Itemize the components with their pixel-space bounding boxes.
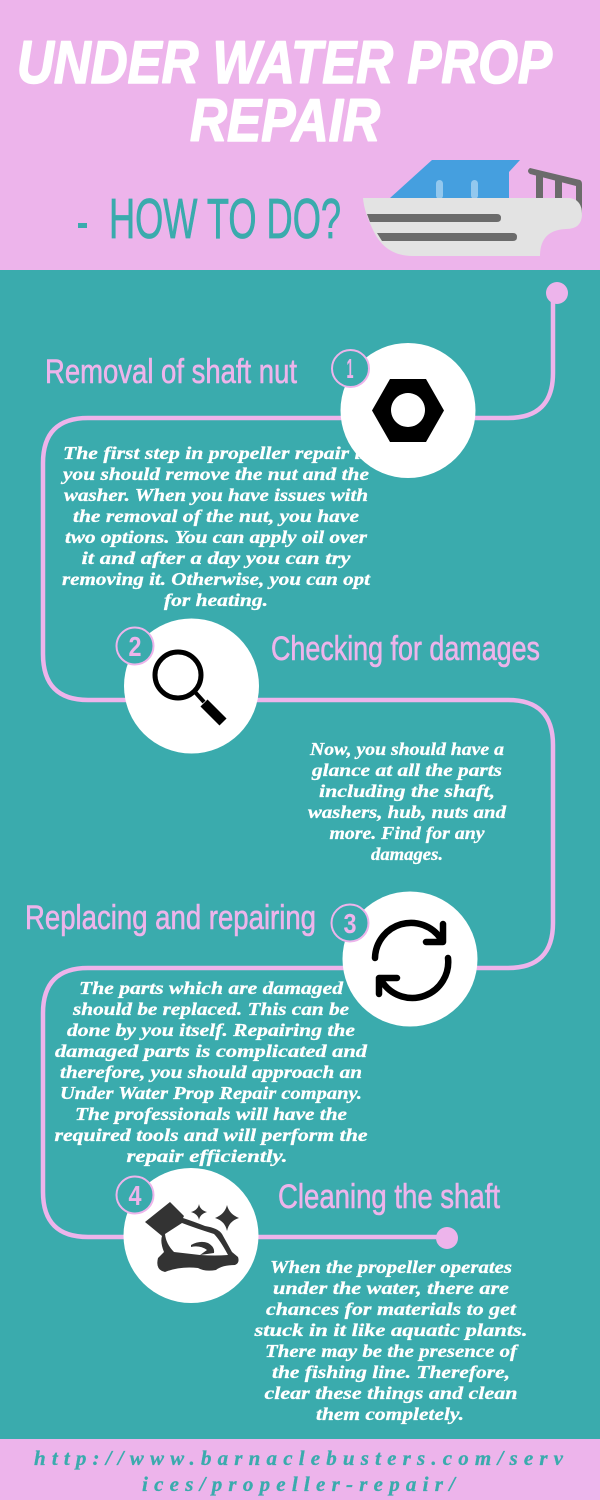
step 4 text: [253, 1257, 528, 1424]
step 3 badge: [332, 904, 368, 942]
step 1 text: you should remove the nut and the: [61, 464, 369, 484]
footer panel: [0, 1439, 600, 1500]
step 1 text: for heating.: [164, 590, 268, 610]
step 3 text: repair efficiently.: [126, 1146, 288, 1166]
step 1 icon circle: [340, 343, 476, 478]
step 4 icon circle: [124, 1168, 258, 1303]
step 1 text: two options. You can apply oil over: [65, 527, 368, 547]
footer URL: ices/propeller-repair/: [142, 1472, 457, 1496]
icon: cleaning hand: [145, 1202, 239, 1272]
step 3 text: damaged parts is complicated and: [55, 1041, 368, 1061]
icon: boat: [363, 160, 582, 256]
step 2 text: washers, hub, nuts and: [308, 802, 507, 822]
step 2 text: more. Find for any: [330, 823, 486, 843]
step 4: [116, 1168, 528, 1424]
step 2 badge: [116, 628, 154, 664]
step 4 badge: 4: [128, 1180, 142, 1211]
step 4 text: stuck in it like aquatic plants.: [253, 1320, 528, 1340]
step 1 text: The first step in propeller repair is: [63, 443, 369, 463]
step 3 text: should be replaced. This can be: [72, 999, 349, 1019]
icon: magnifier: [155, 652, 223, 722]
icon: refresh arrows: [375, 923, 448, 998]
step 1 badge: [332, 350, 369, 387]
step 4 badge: [116, 1176, 154, 1214]
step 4 text: them completely.: [316, 1404, 464, 1424]
connector path: [43, 293, 553, 1237]
step 4 text: the fishing line. Therefore,: [272, 1362, 510, 1382]
step 2 text: damages.: [371, 844, 443, 864]
step 4 text: There may be the presence of: [265, 1341, 519, 1361]
step 4 text: under the water, there are: [273, 1278, 509, 1298]
step 3 text: The professionals will have the: [75, 1104, 347, 1124]
step 2 text: glance at all the parts: [311, 760, 502, 780]
subtitle: [78, 187, 341, 251]
step 3 text: done by you itself. Repairing the: [67, 1020, 355, 1040]
path start dot: [546, 282, 568, 304]
footer URL: http://www.barnaclebusters.com/serv: [34, 1446, 564, 1470]
step 1 text: [61, 443, 371, 610]
step 3 icon circle: [342, 892, 478, 1026]
step 1 text: it and after a day you can try: [82, 548, 352, 568]
step 1 text: the removal of the nut, you have: [73, 506, 359, 526]
step 4 text: When the propeller operates: [270, 1257, 512, 1277]
title: REPAIR: [190, 87, 380, 154]
header panel: [0, 0, 600, 270]
step 3 text: The parts which are damaged: [79, 978, 344, 998]
step 3 text: therefore, you should approach an: [60, 1062, 362, 1082]
step 3 text: required tools and will perform the: [54, 1125, 368, 1145]
icon: hex nut: [372, 379, 444, 442]
title: [17, 29, 553, 154]
step 1 text: washer. When you have issues with: [64, 485, 368, 505]
step 3 text: Under Water Prop Repair company.: [60, 1083, 362, 1103]
step 2 text: including the shaft,: [319, 781, 495, 801]
step 3: [25, 892, 478, 1166]
step 1 heading: Removal of shaft nut: [45, 353, 297, 391]
step 3 badge: 3: [344, 908, 356, 939]
step 2: [116, 618, 540, 864]
step 4 text: chances for materials to get: [266, 1299, 517, 1319]
step 2 text: [308, 739, 507, 864]
step 2 icon circle: [124, 618, 259, 754]
step 2 text: Now, you should have a: [309, 739, 504, 759]
step 1 badge: 1: [346, 353, 354, 384]
path end dot: [436, 1227, 458, 1249]
step 2 badge: 2: [128, 631, 142, 662]
step 4 heading: Cleaning the shaft: [278, 1178, 500, 1216]
subtitle: HOW TO DO?: [109, 187, 341, 251]
step 4 text: clear these things and clean: [264, 1383, 518, 1403]
step 1 text: removing it. Otherwise, you can opt: [62, 569, 371, 589]
step 3 text: [54, 978, 368, 1166]
step 1: [45, 343, 476, 610]
footer URL: [34, 1446, 564, 1496]
step 3 heading: Replacing and repairing: [25, 899, 316, 937]
